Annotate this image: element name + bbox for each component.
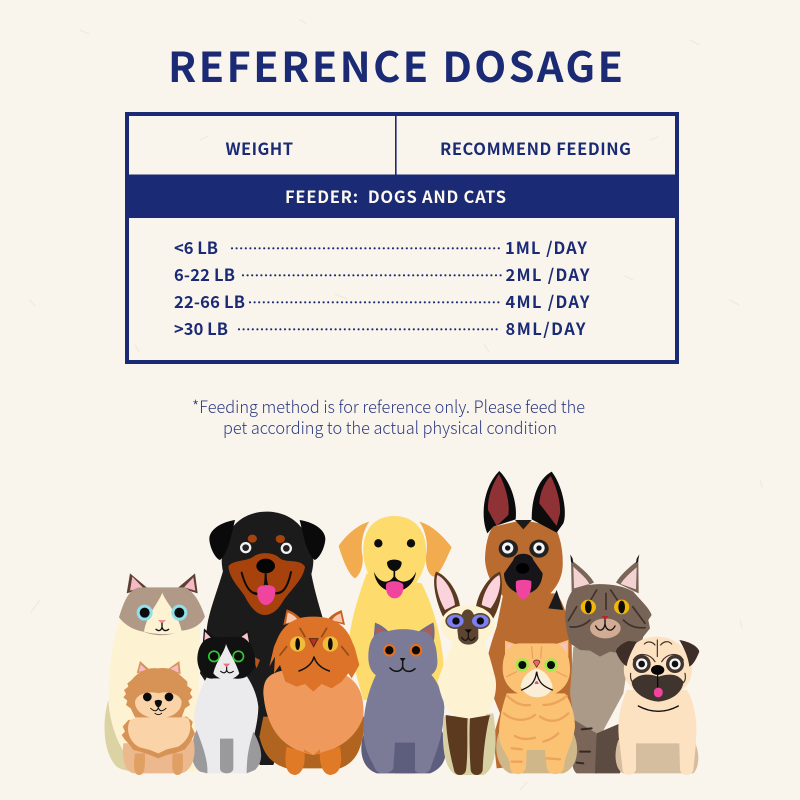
table frame (127, 114, 677, 362)
footnote: pet according to the actual physical condition (223, 414, 557, 439)
dosage row 4: >30 LB (174, 316, 228, 340)
icon: british shorthair cat (361, 622, 446, 773)
dosage row 3: 22-66 LB (174, 289, 245, 313)
icon: maine coon cat (565, 554, 652, 773)
feeder heading: FEEDER: DOGS AND CATS (285, 184, 506, 208)
column divider (395, 116, 397, 175)
illustration: group of pets (105, 471, 699, 775)
dosage row 1 (174, 235, 587, 259)
dosage row 4 (174, 316, 586, 340)
title: REFERENCE DOSAGE (168, 34, 623, 94)
column heading: weight: WEIGHT (226, 136, 293, 160)
icon: siamese cat (434, 572, 502, 775)
feeder band (127, 174, 677, 218)
dosage row 1: <6 LB (174, 235, 218, 259)
icon: pomeranian (122, 661, 195, 775)
icon: persian cat (259, 609, 365, 775)
dosage row 3 (174, 289, 590, 313)
panel: dosage table (127, 114, 677, 362)
dosage row 2: 2ML /DAY (506, 262, 590, 286)
icon: golden retriever (339, 516, 452, 700)
dosage row 2: 6-22 LB (174, 262, 235, 286)
icon: pug (616, 637, 699, 775)
icon: exotic shorthair cat (496, 640, 577, 774)
dosage row 4: 8ML/DAY (506, 316, 586, 340)
dosage row 1: 1ML /DAY (505, 235, 587, 259)
dosage row 2 (174, 262, 590, 286)
icon: rottweiler (200, 512, 325, 765)
icon: ragdoll cat (105, 573, 205, 772)
icon: german shepherd (484, 471, 573, 768)
footnote (192, 393, 585, 439)
column heading: recommend feeding: RECOMMEND FEEDING (440, 136, 631, 160)
icon: tuxedo cat (191, 628, 261, 773)
footnote: *Feeding method is for reference only. Please feed the (192, 393, 585, 418)
dosage row 3: 4ML /DAY (506, 289, 590, 313)
